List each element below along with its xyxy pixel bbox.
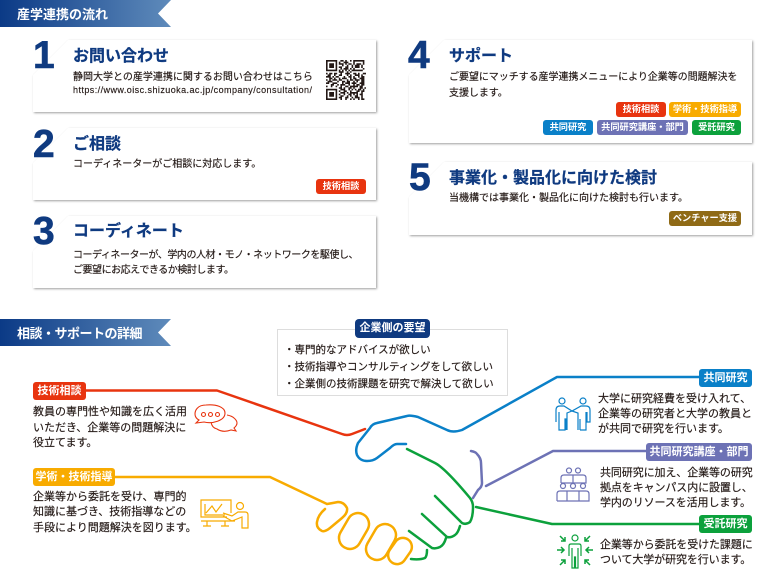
icon: two people shaking hands — [555, 397, 591, 431]
tag: 共同研究 large: 共同研究 — [704, 372, 748, 384]
text: 受託研究 — [600, 538, 753, 566]
tag: 受託研究 large: 受託研究 — [704, 518, 748, 530]
tag: ベンチャー支援: ベンチャー支援 — [673, 213, 737, 223]
text: 技術相談: 役立てます。 — [33, 437, 97, 449]
tag: 受託研究 — [692, 120, 741, 135]
blue line — [356, 377, 700, 461]
text: 技術相談: いただき、企業等の問題解決に — [33, 422, 186, 434]
step 2 text: コーディネーターがご相談に対応します。 — [73, 159, 261, 170]
text: 受託研究: ついて大学が研究を行います。 — [600, 554, 751, 566]
tag: 技術相談 large — [33, 382, 86, 400]
step 3 text: ご要望にお応えできるか検討します。 — [73, 265, 234, 276]
text: 受託研究: 企業等から委託を受けた課題に — [600, 538, 753, 550]
icon: presenter and chart — [200, 499, 249, 529]
demand label — [355, 319, 430, 338]
text: 共同研究 — [598, 392, 752, 434]
banner: 産学連携の流れ — [0, 0, 171, 27]
panel: step 2 — [32, 128, 378, 202]
step 3 heading: コーディネート — [73, 223, 184, 240]
icon: QR code — [326, 60, 366, 100]
tag: 共同研究 — [543, 120, 593, 135]
number 2: 2 — [33, 123, 55, 166]
panel: step 5 — [408, 162, 754, 238]
text: 共同研究: 企業等の研究者と大学の教員と — [598, 408, 752, 420]
demand list: ・専門的なアドバイスが欲しい — [284, 344, 431, 356]
tag: 学術・技術指導 — [669, 102, 741, 117]
tag: 学術・技術指導: 学術・技術指導 — [673, 104, 737, 114]
step 4 text — [449, 71, 737, 99]
orange line and fingers — [115, 477, 415, 568]
tag: 学術・技術指導 large — [33, 468, 115, 486]
step 1 text: 静岡大学との産学連携に関するお問い合わせはこちら — [73, 72, 313, 83]
tag: 技術相談 — [316, 179, 366, 194]
number 3: 3 — [33, 210, 55, 253]
text: 共同研究講座・部門: 学内のリソースを活用します。 — [600, 496, 751, 508]
banner title: details: 相談・サポートの詳細 — [17, 326, 142, 341]
text: 共同研究講座・部門 — [600, 466, 753, 508]
step 3 text: コーディネーターが、学内の人材・モノ・ネットワークを駆使し、 — [73, 250, 358, 261]
demand list: ・技術指導やコンサルティングをして欲しい — [284, 361, 493, 373]
tag: 受託研究 large — [699, 515, 752, 533]
purple line — [471, 451, 648, 498]
panel: step 3 — [32, 216, 378, 290]
panel: 企業側の要望 — [277, 329, 508, 396]
step 1 heading: お問い合わせ — [73, 48, 169, 65]
tag: 技術相談 — [616, 102, 666, 117]
tag: ベンチャー支援 — [669, 211, 741, 226]
tag: 受託研究: 受託研究 — [698, 122, 735, 132]
text: 学術・技術指導: 知識に基づき、技術指導などの — [33, 506, 186, 518]
banner title: flow: 産学連携の流れ — [17, 7, 108, 22]
text: 共同研究講座・部門: 拠点をキャンパス内に設置し、 — [600, 482, 753, 494]
number 1: 1 — [33, 34, 55, 77]
tag: 共同研究: 共同研究 — [550, 122, 586, 132]
green line — [407, 449, 700, 559]
demand label: 企業側の要望 — [360, 322, 426, 334]
tag: 共同研究 large — [699, 369, 752, 387]
step 4 text: ご要望にマッチする産学連携メニューにより企業等の問題解決を — [449, 72, 737, 83]
number 4: 4 — [408, 34, 430, 77]
icon: speech bubbles — [194, 404, 238, 432]
panel: step 1 — [32, 40, 378, 114]
step 1 url: https://www.oisc.shizuoka.ac.jp/company/consultation/ — [73, 85, 312, 95]
text: 共同研究講座・部門: 共同研究に加え、企業等の研究 — [600, 466, 753, 478]
demand list — [284, 344, 494, 390]
step 3 text — [73, 249, 358, 276]
step 4 text: 支援します。 — [449, 88, 508, 99]
tag: 技術相談: 技術相談 — [623, 104, 659, 114]
demand list: ・企業側の技術課題を研究で解決して欲しい — [284, 378, 494, 390]
text: 学術・技術指導: 手段により問題解決を図ります。 — [33, 522, 197, 534]
banner: 相談・サポートの詳細 — [0, 319, 171, 346]
red line — [86, 390, 365, 435]
panel: step 4 — [408, 40, 754, 146]
text: 学術・技術指導: 企業等から委託を受け、専門的 — [33, 490, 186, 502]
number 5: 5 — [409, 156, 431, 199]
tag: 技術相談: 技術相談 — [323, 181, 359, 191]
step 5 text: 当機構では事業化・製品化に向けた検討も行います。 — [449, 193, 688, 204]
tag: 技術相談 large: 技術相談 — [38, 385, 82, 397]
text: 共同研究: が共同で研究を行います。 — [598, 422, 729, 434]
icon: audience group — [556, 467, 590, 502]
tag: 共同研究講座・部門 — [597, 120, 688, 135]
text: 学術・技術指導 — [33, 490, 197, 534]
tag: 共同研究講座・部門 large — [646, 443, 752, 461]
text: 共同研究: 大学に研究経費を受け入れて、 — [598, 392, 751, 404]
tag: 学術・技術指導 large: 学術・技術指導 — [36, 471, 112, 483]
step 2 heading: ご相談 — [73, 136, 121, 153]
step 4 heading: サポート — [449, 48, 513, 65]
icon: person with arrows — [557, 534, 593, 569]
text: 技術相談: 教員の専門性や知識を広く活用 — [33, 406, 187, 418]
step 5 heading: 事業化・製品化に向けた検討 — [449, 170, 657, 187]
text: 技術相談 — [33, 406, 187, 449]
tag: 共同研究講座・部門: 共同研究講座・部門 — [601, 122, 684, 132]
tag: 共同研究講座・部門 large: 共同研究講座・部門 — [650, 446, 748, 458]
